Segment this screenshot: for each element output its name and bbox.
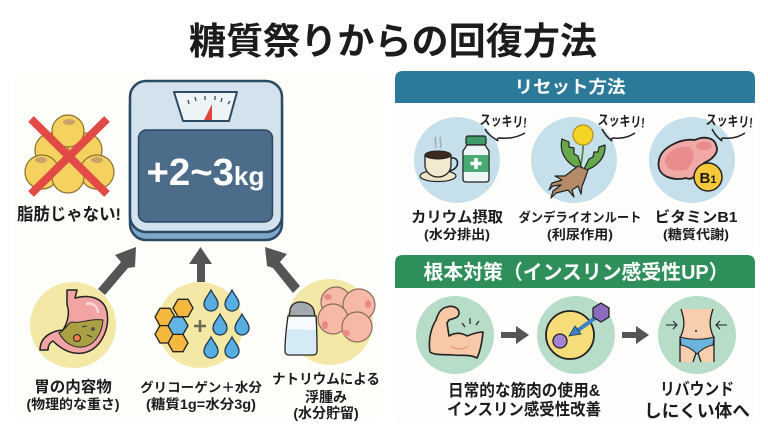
label: sodium swelling: (水分貯留) bbox=[293, 405, 359, 421]
label: vitamin B1: ビタミンB1 bbox=[654, 208, 738, 226]
item: dandelion root bbox=[518, 111, 645, 242]
label: sodium swelling: ナトリウムによる bbox=[272, 371, 380, 387]
title: 糖質祭りからの回復方法 bbox=[189, 21, 597, 62]
label: stomach contents: (物理的な重さ) bbox=[26, 396, 120, 412]
label: potassium: (水分排出) bbox=[424, 227, 490, 242]
item: vitamin B1 bbox=[649, 111, 753, 242]
label: vitamin B1: (糖質代謝) bbox=[663, 227, 729, 242]
icon: stomach bbox=[30, 282, 116, 368]
header: root solution: 根本対策（インスリン感受性UP） bbox=[424, 260, 728, 284]
label: potassium bbox=[411, 209, 503, 242]
label: rebound resistant body: リバウンド bbox=[660, 380, 734, 399]
icon: bathroom scale bbox=[130, 81, 282, 240]
label: rebound resistant body bbox=[644, 380, 750, 421]
arrow: stomach to scale bbox=[98, 247, 136, 295]
arrow: cell to body bbox=[622, 326, 649, 344]
label: sodium swelling: 浮腫み bbox=[305, 389, 347, 405]
arrow: muscle to cell bbox=[501, 326, 529, 344]
label: glycogen and water: グリコーゲン＋水分 bbox=[140, 380, 262, 395]
panel: weight gain causes bbox=[13, 72, 381, 421]
callout: refreshed: スッキリ! bbox=[705, 111, 753, 131]
header: root solution bbox=[395, 255, 755, 288]
arrow: sodium to scale bbox=[265, 247, 300, 293]
label: glycogen and water bbox=[140, 380, 262, 412]
label: muscle use and insulin sensitivity bbox=[447, 381, 601, 419]
label: stomach contents: 胃の内容物 bbox=[34, 378, 112, 396]
icon: coffee and supplement bbox=[414, 117, 500, 203]
panel: reset methods bbox=[395, 71, 755, 248]
callout: refreshed: スッキリ! bbox=[597, 111, 645, 131]
label: dandelion root: (利尿作用) bbox=[547, 227, 613, 242]
icon: slim waist bbox=[658, 296, 736, 374]
weight value: +2~3kg bbox=[146, 152, 264, 194]
icon: salt and swollen cells bbox=[285, 279, 375, 365]
callout: refreshed: スッキリ! bbox=[479, 111, 527, 131]
label: muscle use and insulin sensitivity: インスリン感受性改善 bbox=[447, 399, 601, 419]
header: reset methods bbox=[395, 71, 755, 103]
label: vitamin B1 bbox=[654, 208, 738, 242]
icon: fat cells crossed out bbox=[25, 115, 114, 194]
panel: root solution bbox=[395, 255, 755, 421]
arrow: glycogen to scale bbox=[189, 247, 212, 282]
label: glycogen and water: (糖質1g=水分3g) bbox=[146, 396, 256, 412]
label: dandelion root bbox=[518, 210, 642, 242]
header: reset methods: リセット方法 bbox=[514, 77, 626, 97]
item: potassium bbox=[411, 111, 527, 242]
icon: glycogen and water bbox=[155, 282, 249, 368]
label: rebound resistant body: しにくい体へ bbox=[644, 401, 750, 421]
label: muscle use and insulin sensitivity: 日常的な筋肉の使用& bbox=[448, 381, 600, 400]
icon: flexed arm bbox=[416, 296, 494, 374]
label: dandelion root: ダンデライオンルート bbox=[518, 210, 642, 225]
label: potassium: カリウム摂取 bbox=[411, 209, 503, 226]
scale display bbox=[138, 130, 272, 222]
icon: cell and insulin bbox=[537, 296, 615, 374]
label: stomach contents bbox=[26, 378, 120, 412]
scale dial bbox=[174, 92, 237, 121]
label: sodium swelling bbox=[272, 371, 380, 421]
icon: dandelion bbox=[531, 117, 617, 203]
icon: pork and B1: B1 bbox=[700, 170, 716, 187]
label: not fat: 脂肪じゃない! bbox=[17, 205, 121, 224]
